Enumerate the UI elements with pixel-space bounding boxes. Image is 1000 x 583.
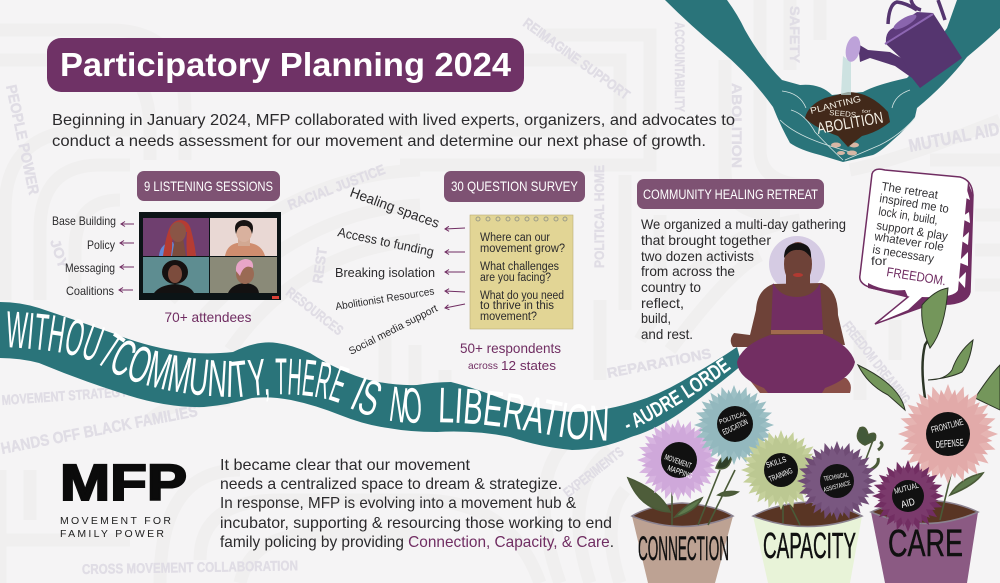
quote banner: THERE bbox=[276, 358, 350, 403]
flower: frontline defense: DEFENSE bbox=[935, 438, 964, 451]
closing text: needs a centralized space to dream & strategize. bbox=[220, 476, 562, 493]
needs labels: Social media support bbox=[347, 302, 440, 358]
retreat description: from across the bbox=[641, 263, 735, 279]
retreat description: reflect, bbox=[641, 295, 684, 311]
logo bbox=[60, 454, 187, 540]
flower: mutual aid: AID bbox=[900, 497, 916, 511]
panel: question survey bbox=[335, 171, 585, 373]
flower: mutual aid bbox=[872, 460, 944, 532]
topic labels: Policy bbox=[87, 238, 115, 252]
logo: MOVEMENT FOR bbox=[60, 515, 171, 527]
flower: skills training: SKILLS bbox=[765, 455, 788, 470]
illustration: meditating person bbox=[731, 236, 855, 393]
ghost words: CROSS MOVEMENT COLLABORATION bbox=[82, 557, 298, 577]
ghost words: HANDS OFF BLACK FAMILIES bbox=[0, 403, 199, 458]
title: Participatory Planning 2024 bbox=[60, 46, 512, 83]
ghost words: REIMAGINE SUPPORT bbox=[520, 14, 634, 103]
needs labels: Abolitionist Resources bbox=[335, 285, 435, 313]
ghost words: ACCOUNTABILITY bbox=[672, 22, 688, 112]
logo: MFP bbox=[60, 454, 187, 511]
flower: political education: POLITICAL bbox=[718, 410, 748, 426]
pot: capacity: CAPACITY bbox=[763, 525, 856, 566]
heading bbox=[637, 179, 824, 209]
intro text: conduct a needs assessment for our movement and determine our next phase of growth. bbox=[52, 133, 706, 150]
soil with label bbox=[805, 92, 890, 147]
respondents count: 50+ respondents bbox=[460, 340, 561, 356]
notepad: Where can our bbox=[480, 232, 550, 244]
quote text: inspired me to bbox=[879, 191, 950, 216]
needs labels bbox=[335, 184, 442, 358]
retreat description bbox=[641, 216, 846, 342]
quote text: lock in, build, bbox=[878, 204, 939, 227]
topic labels: Base Building bbox=[52, 214, 116, 228]
retreat description: country to bbox=[641, 279, 701, 295]
quote text: The retreat bbox=[881, 179, 940, 202]
illustration: watering can bbox=[843, 0, 962, 88]
topic labels bbox=[52, 214, 116, 298]
flower: movement mapping: MOVEMENT bbox=[663, 452, 693, 470]
closing text: In response, MFP is evolving into a movement hub & bbox=[220, 495, 576, 512]
flower: movement mapping bbox=[636, 418, 720, 502]
ghost words: JOY bbox=[47, 237, 72, 271]
soil with label: ABOLITION bbox=[816, 110, 885, 138]
arrows bbox=[119, 224, 134, 290]
ghost words: SAFETY bbox=[787, 6, 803, 64]
needs labels: Healing spaces bbox=[348, 184, 442, 231]
flower: skills training bbox=[740, 429, 822, 511]
flower: technical assistance: ASSISTANCE bbox=[823, 480, 852, 494]
retreat description: We organized a multi-day gathering bbox=[641, 216, 846, 232]
ghost words: POLITICAL HOME bbox=[591, 165, 607, 268]
plant: vine bbox=[858, 288, 1000, 410]
retreat description: build, bbox=[641, 310, 671, 326]
flower: frontline defense bbox=[897, 383, 999, 485]
pot: care bbox=[871, 500, 978, 583]
notepad: to thrive in this bbox=[480, 300, 554, 312]
respondents count bbox=[460, 340, 561, 373]
quote text: for bbox=[871, 254, 887, 268]
intro text bbox=[52, 112, 735, 150]
retreat description: and rest. bbox=[641, 326, 693, 342]
flower: movement mapping: MAPPING bbox=[666, 463, 694, 481]
notepad: What challenges bbox=[480, 261, 559, 273]
heading bbox=[444, 171, 585, 202]
quote banner: COMMUNITY, bbox=[112, 340, 269, 402]
respondents count: 12 states bbox=[501, 358, 557, 373]
heading bbox=[137, 171, 280, 201]
video call screen bbox=[139, 212, 281, 300]
quote banner: NO bbox=[390, 386, 421, 424]
flower: frontline defense: FRONTLINE bbox=[930, 417, 964, 435]
pot: capacity bbox=[753, 502, 862, 583]
ghost words: ABOLITION bbox=[729, 83, 745, 168]
water stream bbox=[841, 56, 851, 95]
notepad: movement? bbox=[480, 311, 537, 323]
closing text: family policing by providing Connection, Capacity, & Care. bbox=[220, 534, 614, 551]
heading: COMMUNITY HEALING RETREAT bbox=[643, 187, 818, 202]
respondents count: across bbox=[468, 360, 498, 372]
soil with label: for bbox=[862, 108, 872, 114]
panel: healing retreat bbox=[637, 169, 973, 393]
ghost words: EXPERIMENTS bbox=[560, 443, 627, 500]
quote text: whatever role bbox=[873, 229, 945, 254]
ghost words: MOVEMENT STRATEGY bbox=[1, 383, 128, 408]
speech bubble bbox=[860, 169, 973, 324]
retreat description: that brought together bbox=[641, 232, 771, 248]
closing text bbox=[220, 457, 614, 551]
topic labels: Coalitions bbox=[66, 284, 114, 298]
quote text: support & play bbox=[876, 218, 949, 243]
flower: technical assistance: TECHNICAL bbox=[823, 472, 849, 483]
notepad bbox=[470, 215, 573, 329]
quote banner: LIBERATION bbox=[440, 388, 608, 441]
flower: political education bbox=[693, 384, 775, 466]
intro text: Beginning in January 2024, MFP collaborated with lived experts, organizers, and advocates to bbox=[52, 112, 735, 129]
pot: care: CARE bbox=[888, 523, 963, 565]
arrows bbox=[445, 228, 465, 308]
quote banner: IS bbox=[350, 377, 382, 415]
notepad: are you facing? bbox=[480, 272, 551, 284]
stems and leaves bbox=[628, 427, 983, 525]
needs labels: Access to funding bbox=[336, 224, 435, 259]
quote text: FREEDOM. bbox=[886, 264, 947, 288]
needs labels: Breaking isolation bbox=[335, 265, 435, 280]
ghost words: FREEDOM DREAMING bbox=[840, 318, 914, 407]
flower: political education: EDUCATION bbox=[721, 417, 749, 437]
closing text: It became clear that our movement bbox=[220, 457, 471, 474]
panel: listening sessions bbox=[52, 171, 281, 325]
closing text: incubator, supporting & resourcing those working to end bbox=[220, 515, 612, 532]
quote banner: WITHOUT bbox=[8, 311, 126, 366]
ghost words: RESOURCES bbox=[283, 284, 347, 338]
attendees count: 70+ attendees bbox=[164, 309, 252, 325]
quote banner bbox=[0, 302, 740, 450]
topic labels: Messaging bbox=[65, 261, 115, 275]
ghost words: REST bbox=[309, 246, 330, 284]
illustration: hands holding soil bbox=[665, 0, 1000, 162]
quote banner: - AUDRE LORDE bbox=[626, 357, 732, 428]
soil with label: SEEDS bbox=[829, 108, 857, 119]
ghost words: REPARATIONS bbox=[606, 345, 713, 381]
soil with label: PLANTING bbox=[809, 94, 862, 116]
retreat description: two dozen activists bbox=[641, 248, 754, 264]
title bbox=[47, 38, 524, 92]
flower: skills training: TRAINING bbox=[767, 466, 794, 484]
quote text: is necessary bbox=[872, 242, 935, 266]
heading: 30 QUESTION SURVEY bbox=[451, 178, 579, 194]
text: CONNECTION bbox=[638, 530, 729, 568]
flower: technical assistance bbox=[796, 440, 878, 522]
notepad: What do you need bbox=[480, 290, 564, 302]
pot: connection bbox=[632, 503, 733, 583]
logo: FAMILY POWER bbox=[60, 528, 164, 540]
ghost words: RACIAL JUSTICE bbox=[285, 161, 387, 213]
notepad: movement grow? bbox=[480, 243, 565, 255]
heading: 9 LISTENING SESSIONS bbox=[144, 178, 273, 194]
quote text bbox=[871, 179, 950, 288]
flower: mutual aid: MUTUAL bbox=[893, 481, 920, 496]
ghost words: PEOPLE POWER bbox=[2, 83, 42, 197]
